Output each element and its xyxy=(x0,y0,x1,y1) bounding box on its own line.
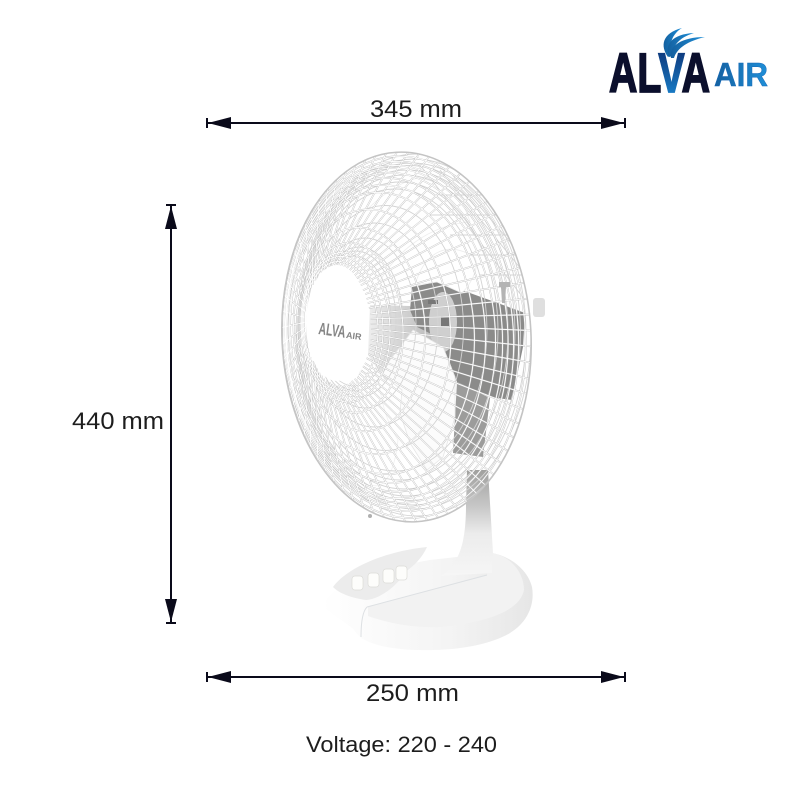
blade: upper right xyxy=(415,249,476,293)
motor housing xyxy=(410,282,525,400)
radial wires, grey edge xyxy=(273,146,540,528)
logo wordmark: ALVA xyxy=(609,41,710,104)
fan product illustration xyxy=(272,146,545,650)
motor and dark backing behind grille xyxy=(368,282,525,457)
hub disc xyxy=(306,265,368,381)
arrow: base width xyxy=(206,671,626,683)
label: 250 mm: 250 mm xyxy=(366,680,459,707)
base seam xyxy=(361,575,487,637)
ring wires, white core xyxy=(274,150,535,524)
motor vents xyxy=(428,300,449,326)
label: 440 mm: 440 mm xyxy=(72,408,164,435)
fan base xyxy=(322,547,533,650)
infographic: fan dimensions xyxy=(72,28,768,756)
label: 345 mm: 345 mm xyxy=(370,96,462,123)
grille rim xyxy=(272,146,541,528)
blade: top left xyxy=(335,178,470,290)
voltage text: Voltage: 220 - 240 xyxy=(306,732,497,757)
motor neck xyxy=(453,382,490,457)
arrow: height xyxy=(165,204,177,624)
top screw xyxy=(499,282,510,303)
grille: front cage wires xyxy=(272,146,541,528)
arrow: top width xyxy=(206,117,626,129)
base body xyxy=(322,553,533,650)
motor face xyxy=(429,292,457,352)
grille: rear cage xyxy=(296,154,538,516)
control panel oval xyxy=(333,547,427,600)
fan stem xyxy=(440,470,493,576)
hub logo: ALVAAIR xyxy=(317,319,364,344)
base top surface xyxy=(368,553,524,627)
height dimension: 440 mm xyxy=(72,204,177,624)
blade: lower left xyxy=(354,372,398,486)
width dimension: 345 mm xyxy=(206,96,626,129)
radial wires, white core xyxy=(273,146,540,528)
depth dimension: 250 mm xyxy=(206,671,626,707)
control knobs xyxy=(352,566,407,590)
side clip xyxy=(533,298,545,317)
logo: Alva Air xyxy=(609,28,768,104)
fan blades xyxy=(335,178,476,486)
blade: lower right xyxy=(380,330,455,470)
fan hub xyxy=(306,265,368,381)
icon: logo wind swoosh xyxy=(664,28,705,58)
logo suffix: AIR xyxy=(714,56,768,93)
bottom screw xyxy=(368,514,372,518)
grille side clips and screw xyxy=(368,282,545,518)
light hub shaft shadow xyxy=(368,305,437,380)
ring wires, grey edge xyxy=(274,150,535,524)
